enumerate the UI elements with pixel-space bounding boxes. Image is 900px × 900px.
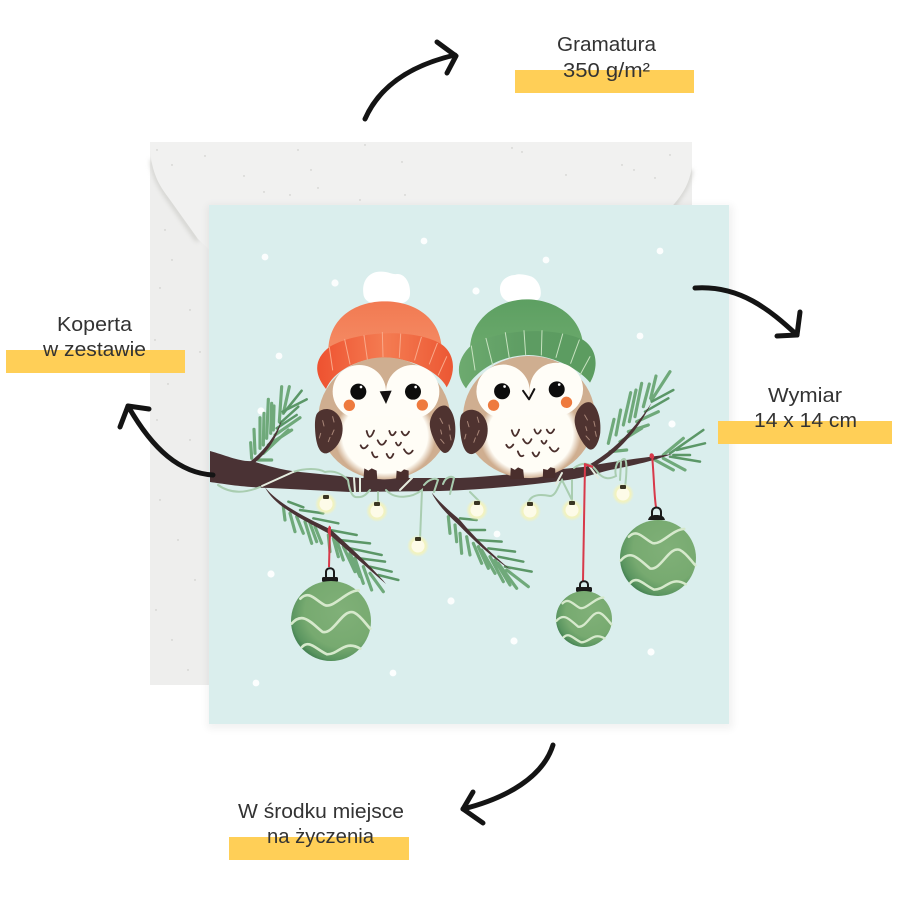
greeting card [209, 205, 729, 724]
label: inside space: W środku miejsce [238, 801, 404, 823]
wings [459, 409, 489, 454]
arrow: to grammage [365, 42, 456, 119]
envelope flap [150, 142, 692, 260]
label: inside space: na życzenia [267, 826, 375, 848]
branch shoot [250, 420, 282, 464]
arrow: to dimensions [695, 288, 800, 336]
pine sprigs left [250, 387, 457, 592]
branch lower left [265, 487, 386, 584]
envelope [150, 142, 692, 700]
feet [510, 467, 524, 479]
light string [218, 459, 626, 540]
cheeks [488, 399, 499, 411]
ornament right [620, 454, 696, 596]
string lights [315, 483, 634, 557]
label: inside space [229, 801, 409, 860]
ornament middle [556, 464, 612, 647]
pompom [500, 274, 541, 303]
label: grammage: Gramatura [557, 34, 657, 56]
chest marks [361, 431, 413, 458]
main branch [210, 451, 672, 492]
beak [380, 391, 392, 404]
chest marks [506, 428, 559, 457]
label: grammage [515, 34, 694, 93]
pompom [363, 272, 410, 305]
label: grammage: 350 g/m² [563, 60, 650, 82]
ornament left [291, 526, 371, 661]
label: dimensions: 14 x 14 cm [754, 410, 857, 432]
label: envelope [6, 314, 185, 373]
wings [315, 409, 343, 453]
owl body [461, 354, 597, 480]
label: dimensions: Wymiar [768, 385, 842, 407]
branch upper right [587, 403, 652, 468]
owl with green hat [458, 274, 602, 481]
label: envelope: w zestawie [42, 339, 146, 361]
arrow: to envelope [120, 406, 213, 475]
card shadow [207, 205, 733, 729]
beak [523, 389, 535, 400]
branch middle lower [432, 493, 512, 571]
owl with orange hat [315, 272, 455, 480]
envelope flap fold shadow [152, 160, 691, 241]
green hat [459, 299, 596, 388]
label: dimensions [718, 385, 892, 444]
eyes [350, 384, 366, 400]
pine sprigs right [432, 372, 705, 588]
label: envelope: Koperta [57, 314, 133, 336]
owl body [318, 357, 450, 479]
cheeks [344, 400, 355, 411]
orange hat [317, 301, 453, 389]
snow dots [253, 238, 676, 686]
arrow: to inside text [463, 745, 553, 823]
feet [363, 468, 377, 480]
eyes [494, 383, 510, 400]
